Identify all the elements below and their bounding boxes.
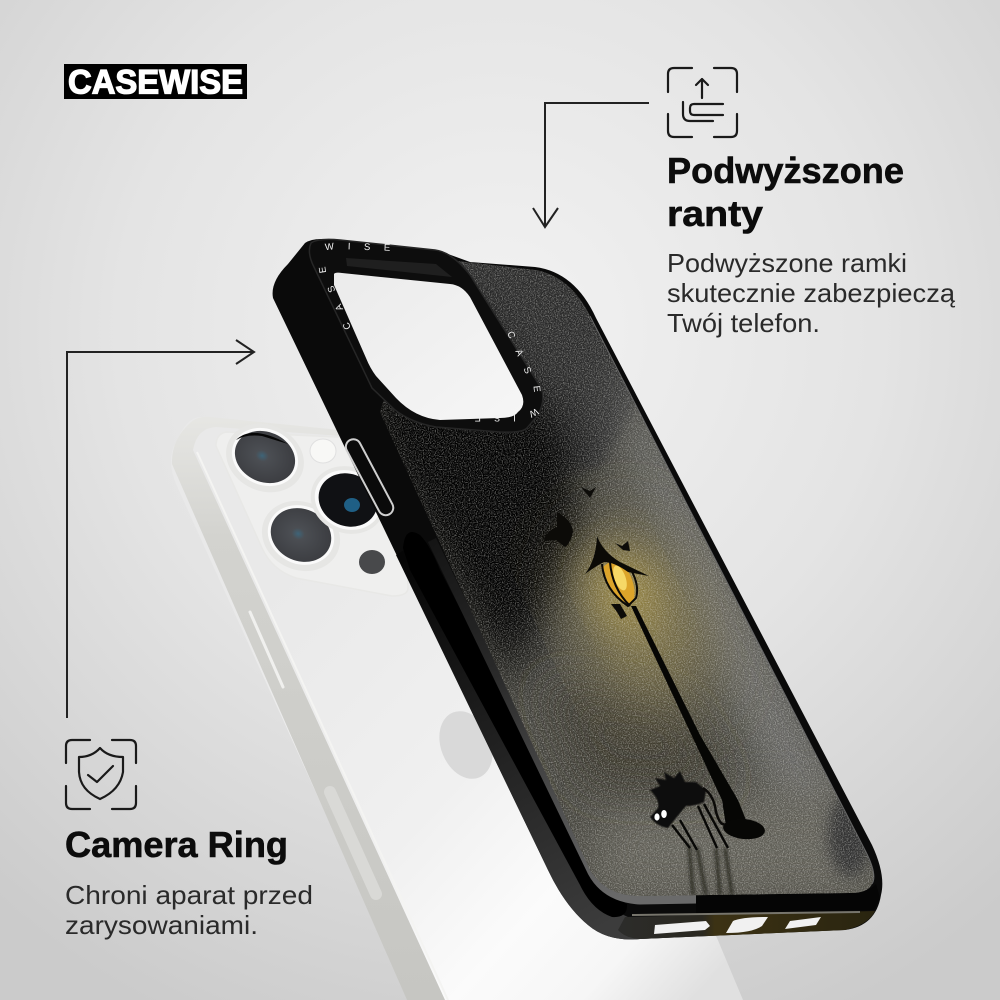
dark shadow upper left (380, 344, 594, 694)
butterfly top (581, 487, 596, 498)
ring inner wall glare (346, 258, 452, 277)
lower side button (330, 792, 376, 894)
sensor (359, 550, 385, 574)
right gloss edge (590, 316, 874, 884)
dark corner bottom right (828, 793, 872, 877)
dark wedge under ring (544, 432, 586, 554)
ring engraving right: CASEWISE (475, 332, 541, 422)
lamp roof (585, 536, 649, 576)
side wall slot (403, 532, 627, 917)
floor (590, 790, 880, 900)
camera plate (216, 432, 408, 596)
text: raised edges description: Podwyższone ramki (667, 248, 907, 278)
lens top (215, 412, 315, 504)
cat shadows (689, 845, 732, 895)
icon: shield (66, 740, 136, 809)
frame inner highlight (197, 452, 448, 1000)
camera ring (308, 238, 544, 433)
inner rim highlight (432, 540, 697, 900)
arrow: to camera ring (67, 340, 254, 718)
black phone case (272, 238, 882, 940)
cat tail (703, 788, 725, 824)
text: raised edges description: skutecznie zabezpieczą (667, 278, 956, 308)
lamp pane highlight (613, 566, 627, 590)
artwork base (380, 261, 874, 896)
heading: raised edges: ranty (667, 193, 763, 234)
butterfly large (544, 512, 573, 547)
butterfly lower (611, 604, 627, 619)
microphone port (785, 917, 821, 929)
bottom lip highlight (632, 912, 860, 915)
lamp frame (602, 562, 637, 606)
speaker port (726, 917, 768, 933)
ring opening (334, 273, 523, 420)
cat (650, 771, 728, 850)
lower outer rim (396, 540, 700, 939)
upper dark wash (459, 262, 636, 474)
volume button (343, 437, 396, 518)
heading: camera ring: Camera Ring (65, 824, 288, 865)
arrow: to raised edges (533, 103, 649, 227)
mid olive shade (540, 680, 730, 790)
cat fur (650, 771, 706, 828)
flash (310, 439, 336, 463)
text: camera ring description (65, 880, 313, 940)
text: camera ring description: zarysowaniami. (65, 910, 258, 940)
lens bottom (251, 489, 351, 583)
upper side button (250, 612, 283, 687)
printed back: lantern and cat artwork (380, 261, 874, 896)
film grain (380, 261, 874, 896)
ring body (309, 239, 543, 432)
white phone (171, 412, 743, 1000)
cat eyes (654, 813, 660, 821)
lamp pole (631, 606, 746, 826)
lamp foot (723, 819, 765, 840)
right grey wash (601, 362, 836, 806)
lamp glow core (585, 545, 665, 635)
ring engraving left and top: CASEWISE (318, 242, 390, 330)
bottom rim black section (696, 884, 880, 914)
logo: CASEWISE (68, 64, 243, 102)
icon: raised edges (668, 68, 737, 137)
apple logo (430, 703, 502, 787)
lamp lit pane (603, 562, 634, 603)
lamp glow (558, 518, 722, 722)
bottom lip (618, 911, 875, 939)
phone body (171, 417, 743, 1000)
cat legs (672, 804, 728, 850)
text: camera ring description: Chroni aparat przed (65, 880, 313, 910)
text: raised edges description (667, 248, 956, 338)
butterfly roof (615, 541, 630, 551)
phone frame edge (172, 417, 445, 1000)
heading: raised edges: Podwyższone (667, 150, 904, 191)
lens right (300, 454, 396, 546)
heading: raised edges (667, 150, 904, 234)
charging port (654, 921, 710, 934)
text: raised edges description: Twój telefon. (667, 308, 820, 338)
case shell (273, 239, 882, 939)
